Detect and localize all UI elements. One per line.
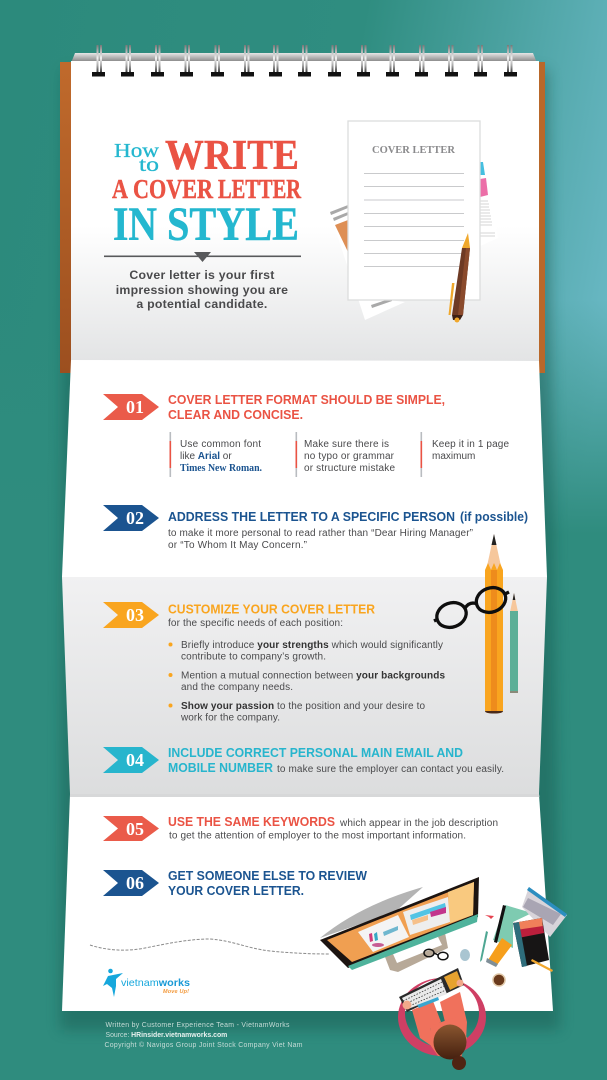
badge 05 (103, 816, 159, 841)
bullets: Mention a mutual connection between your backgrounds (181, 670, 445, 682)
monitor back shadow (320, 887, 423, 938)
keyboard (399, 968, 464, 1012)
black notebook (513, 918, 549, 967)
title divider with arrow (104, 252, 301, 262)
intro text: a potential candidate. (136, 297, 268, 311)
dashed line (90, 939, 330, 954)
heading 01: COVER LETTER FORMAT SHOULD BE SIMPLE, (168, 393, 445, 407)
badge 03: 03 (126, 605, 144, 625)
tip: typo: no typo or grammar (304, 451, 395, 462)
title: A (112, 174, 128, 204)
footer credits (104, 1022, 303, 1049)
heading 03: CUSTOMIZE YOUR COVER LETTER (168, 602, 375, 616)
small glasses (424, 949, 448, 960)
bullets: contribute to company’s growth. (181, 652, 326, 662)
panel: section three white fold (62, 794, 553, 1011)
browser window card (522, 887, 567, 937)
spiral binding rings (92, 45, 517, 76)
tip: font (180, 439, 262, 474)
title: STYLE (167, 198, 299, 251)
heading 04 (168, 746, 463, 775)
panel: section one white fold (62, 360, 547, 577)
heading 02: ADDRESS THE LETTER TO A SPECIFIC PERSON (168, 510, 455, 524)
tip: length: maximum (432, 451, 475, 462)
badge 06: 06 (126, 873, 144, 893)
front letter (348, 121, 480, 300)
title: COVER (133, 174, 213, 204)
tip: length: Keep it in 1 page (432, 439, 509, 450)
panel: section two grey fold (62, 577, 547, 794)
step 02 (103, 505, 528, 551)
bullets (168, 640, 445, 724)
heading 04: INCLUDE CORRECT PERSONAL MAIN EMAIL AND (168, 746, 463, 760)
heading 02: (if possible) (460, 510, 528, 524)
logo figure (103, 969, 123, 997)
bullets: and the company needs. (181, 682, 293, 693)
red clip (485, 915, 494, 919)
badge 05: 05 (126, 819, 144, 839)
title: How (114, 140, 160, 162)
tip: typo: Make sure there is (304, 439, 389, 450)
illustration: glasses (433, 584, 509, 631)
title: WRITE (165, 133, 299, 179)
intro text: impression showing you are (116, 283, 288, 297)
heading 05: USE THE SAME KEYWORDS (168, 815, 335, 829)
body 04: to make sure the employer can contact you easily. (277, 764, 504, 775)
panel: header page (71, 61, 539, 361)
badge 01 (103, 394, 159, 420)
body 03: for the specific needs of each position: (168, 618, 343, 629)
step 06 (103, 869, 367, 898)
monitor stand (385, 933, 448, 972)
badge 04 (103, 747, 159, 773)
tip: font: Use common font (180, 439, 261, 450)
monitor (320, 877, 479, 970)
yellow pencil (531, 959, 553, 972)
front letter: COVER LETTER (372, 145, 455, 156)
legs and torso (412, 992, 467, 1058)
bullets: Show your passion to the position and your desire to (181, 701, 425, 712)
bullets: work for the company. (180, 712, 280, 724)
illustration: big pencil (485, 534, 503, 714)
green notebook (493, 905, 532, 948)
notebook backing board (60, 62, 545, 373)
notebook top strip (71, 53, 537, 63)
title: IN (113, 198, 157, 251)
logo: vietnamworks (103, 969, 190, 997)
chair (398, 978, 486, 1056)
tip dividers (170, 432, 422, 477)
person (398, 968, 486, 1070)
logo wordmark: vietnamworks (121, 977, 190, 989)
step 04 (103, 746, 504, 775)
body 02: to make it more personal to read rather than “Dear Hiring Manager” (168, 528, 473, 539)
heading 04: MOBILE NUMBER (168, 761, 273, 775)
heading 06 (168, 869, 367, 898)
badge 01: 01 (126, 397, 144, 417)
title (112, 133, 301, 251)
mouse (460, 949, 470, 961)
step 01 (103, 393, 509, 477)
tip: typo: or structure mistake (304, 463, 395, 474)
heading 01 (168, 393, 445, 422)
back paper left (330, 205, 405, 320)
fold shadow (70, 794, 540, 797)
body 02 (168, 528, 473, 551)
tip: typo (304, 439, 395, 474)
step 03 (103, 602, 445, 724)
tip: length (432, 439, 509, 462)
heading 06: GET SOMEONE ELSE TO REVIEW (168, 869, 367, 883)
badge 06 (103, 870, 159, 896)
body 05 (169, 818, 498, 842)
footer credits: Source: HRinsider.vietnamworks.com (106, 1032, 227, 1039)
badge 03 (103, 602, 159, 628)
badge 02: 02 (126, 508, 144, 528)
orange phone (486, 938, 512, 967)
tip: font: Times New Roman. (180, 463, 262, 474)
heading 01: CLEAR AND CONCISE. (168, 408, 303, 422)
body 05: which appear in the job description (339, 818, 498, 829)
title: to (139, 154, 159, 176)
pen (448, 233, 470, 322)
page shadow (60, 70, 560, 1030)
illustration: small pencil (510, 593, 518, 693)
head (434, 1024, 466, 1060)
tip: font: like Arial or (180, 451, 232, 462)
intro text (116, 268, 288, 311)
hair bun (452, 1056, 466, 1070)
pencil on desk (480, 931, 488, 962)
body 05: to get the attention of employer to the most important information. (169, 830, 466, 842)
logo tagline: Move Up! (163, 989, 189, 995)
step 05 (103, 815, 498, 842)
coffee cup (492, 973, 506, 987)
badge 04: 04 (126, 750, 144, 770)
body 02: or “To Whom It May Concern.” (168, 540, 307, 551)
illustration: desk scene (320, 877, 567, 1070)
back paper right (478, 160, 498, 247)
title: LETTER (218, 174, 301, 204)
footer credits: Copyright © Navigos Group Joint Stock Company Viet Nam (104, 1041, 303, 1049)
badge 02 (103, 505, 159, 531)
heading 06: YOUR COVER LETTER. (168, 884, 304, 898)
illustration: cover letter papers and pen (330, 121, 498, 322)
hands (402, 1000, 412, 1010)
footer credits: Written by Customer Experience Team - VietnamWorks (106, 1022, 290, 1029)
intro text: Cover letter is your first (129, 268, 275, 282)
bullets: Briefly introduce your strengths which would significantly (181, 640, 443, 651)
